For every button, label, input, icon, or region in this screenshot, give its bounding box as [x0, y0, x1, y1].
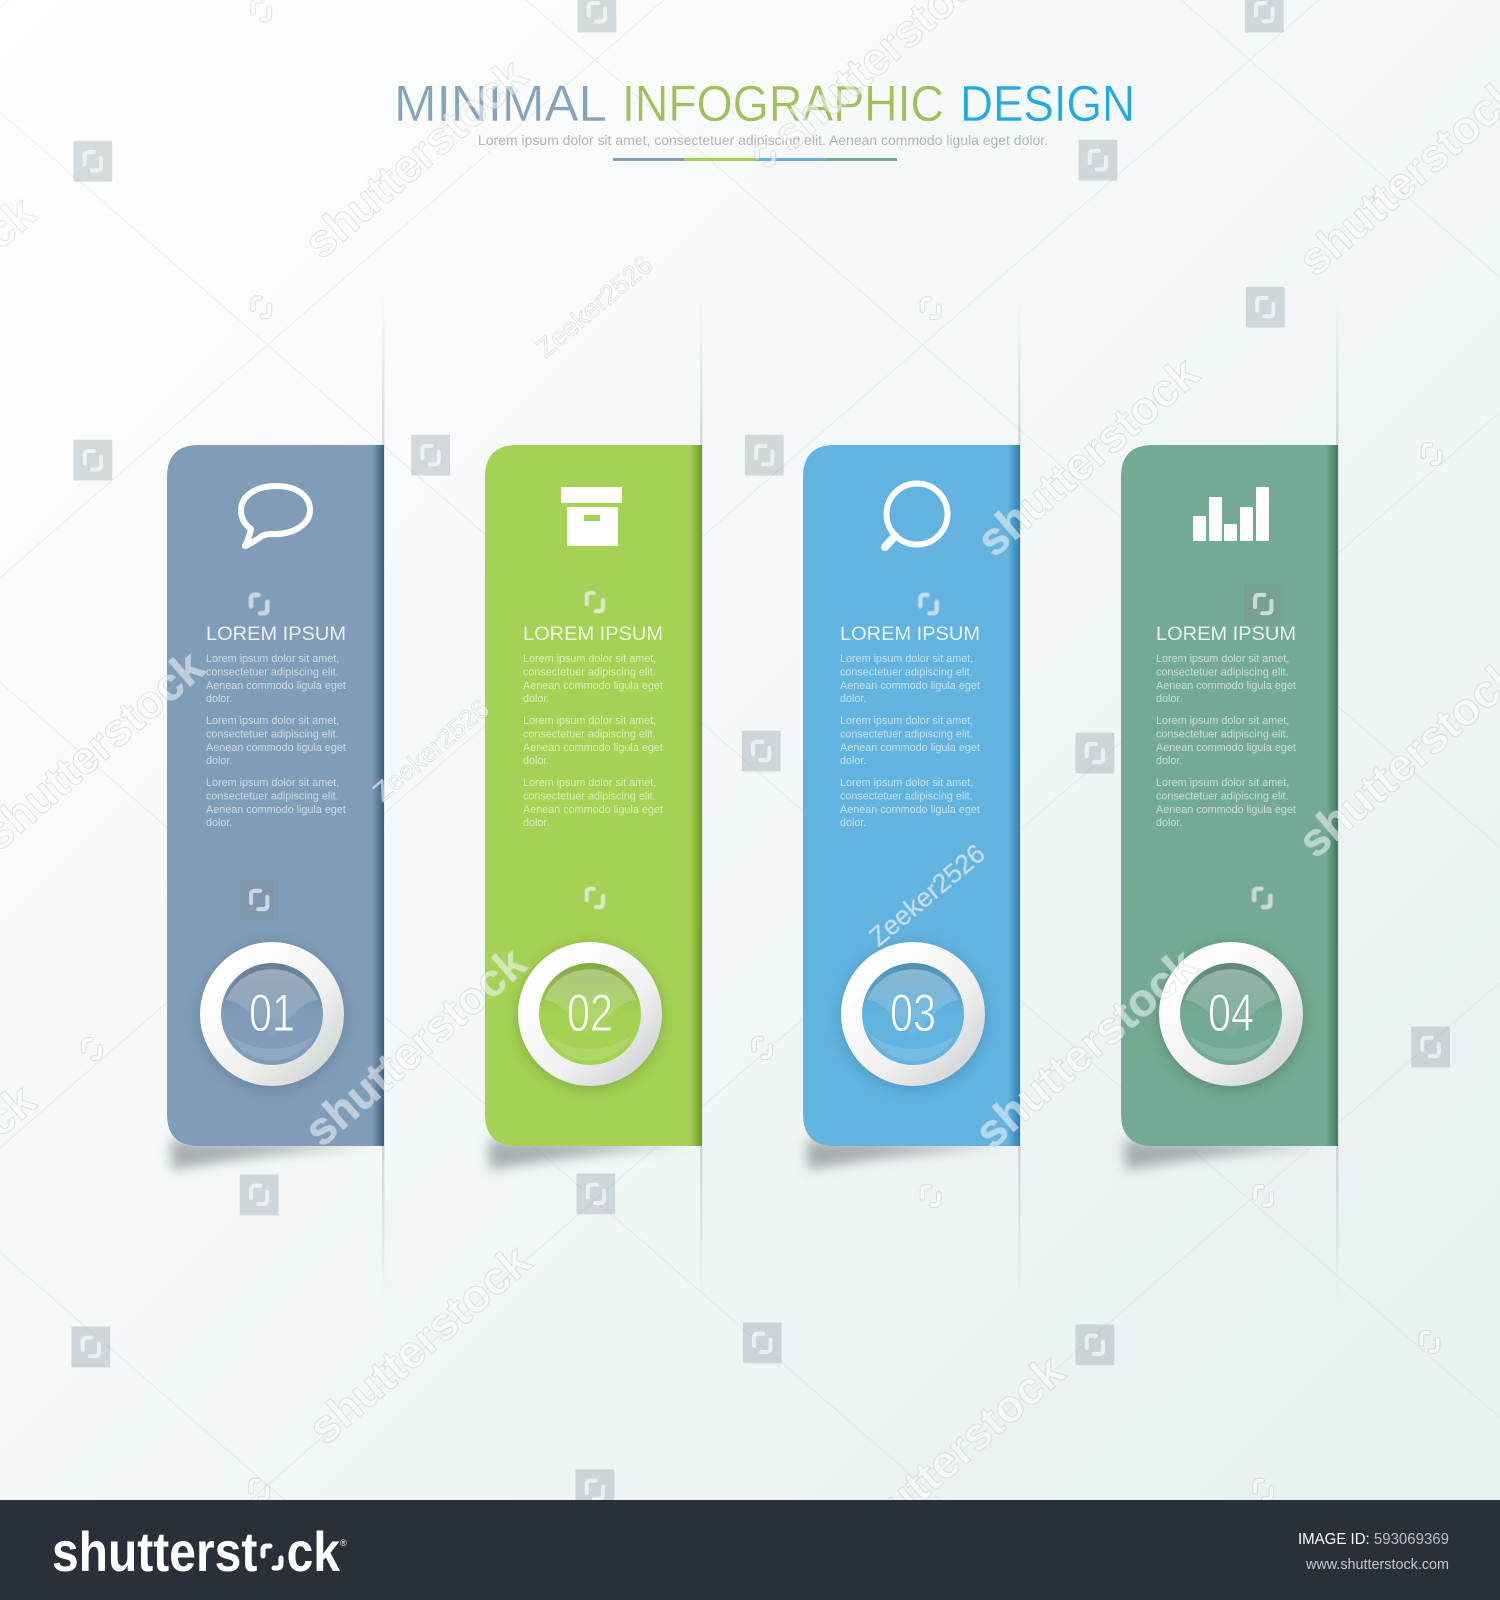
slit lines	[382, 295, 1338, 1305]
panel: card 02	[485, 445, 702, 1170]
watermark overlay: shutterstock	[966, 346, 1209, 566]
watermark overlay: Zeeker2526	[863, 838, 991, 952]
body text: Lorem ipsum dolor sit amet,	[523, 715, 656, 727]
icon: speech bubble	[241, 486, 310, 546]
body text: Lorem ipsum dolor sit amet,	[1156, 653, 1289, 665]
body text: dolor.	[523, 693, 549, 705]
card shadow	[806, 1140, 1006, 1170]
body text: Aenean commodo ligula eget	[840, 680, 980, 692]
watermark overlay: shutterstock	[298, 1234, 540, 1454]
body text: Aenean commodo ligula eget	[206, 804, 346, 816]
watermark overlay: shutterstock	[294, 48, 536, 268]
panel: card 03	[803, 445, 1020, 1170]
body text: dolor.	[523, 755, 549, 767]
card edge	[1326, 445, 1338, 1146]
body text: Lorem ipsum dolor sit amet,	[840, 715, 973, 727]
watermark overlay: Zeeker2526	[367, 693, 495, 807]
heading: LOREM IPSUM	[523, 623, 663, 645]
number badge: 01	[249, 984, 295, 1043]
body text: Lorem ipsum dolor sit amet,	[523, 653, 656, 665]
body text: dolor.	[1156, 693, 1182, 705]
heading: LOREM IPSUM	[206, 623, 346, 645]
body text: dolor.	[840, 755, 866, 767]
body text	[840, 653, 980, 829]
body text: dolor.	[1156, 755, 1182, 767]
card edge	[372, 445, 384, 1146]
body text: Lorem ipsum dolor sit amet,	[206, 777, 339, 789]
body text: Aenean commodo ligula eget	[206, 680, 346, 692]
body text: dolor.	[523, 817, 549, 829]
footer url: www.shutterstock.com	[1305, 1556, 1449, 1573]
panel: card 04	[1121, 445, 1338, 1170]
image id: IMAGE ID: 593069369	[1298, 1531, 1449, 1548]
watermark overlay: shutterstock	[832, 1344, 1074, 1564]
number badge	[839, 942, 987, 1091]
body text: dolor.	[206, 755, 232, 767]
body text: Lorem ipsum dolor sit amet,	[523, 777, 656, 789]
panel: card 01	[167, 445, 384, 1170]
number badge	[516, 942, 664, 1091]
card shadow	[170, 1140, 370, 1170]
footer bar	[0, 1500, 1500, 1600]
number badge	[1157, 942, 1305, 1091]
body text: consectetuer adipiscing elit.	[1156, 790, 1289, 802]
body text: Aenean commodo ligula eget	[206, 742, 346, 754]
body text: consectetuer adipiscing elit.	[523, 728, 656, 740]
card body	[167, 445, 384, 1146]
card body	[485, 445, 702, 1146]
body text: Lorem ipsum dolor sit amet,	[1156, 715, 1289, 727]
title: MINIMAL	[394, 75, 607, 132]
body text: consectetuer adipiscing elit.	[1156, 666, 1289, 678]
card shadow	[1124, 1140, 1324, 1170]
body text	[523, 653, 663, 829]
body text: Lorem ipsum dolor sit amet,	[206, 653, 339, 665]
logo bracket mark	[263, 1546, 281, 1568]
body text: Aenean commodo ligula eget	[1156, 804, 1296, 816]
body text: Aenean commodo ligula eget	[523, 742, 663, 754]
card shadow	[488, 1140, 688, 1170]
watermark overlay: Zeeker2526	[530, 249, 658, 363]
body text: consectetuer adipiscing elit.	[206, 790, 339, 802]
title	[394, 75, 1135, 132]
body text: Aenean commodo ligula eget	[840, 804, 980, 816]
watermark overlay: shutterstock	[964, 938, 1207, 1158]
body text: consectetuer adipiscing elit.	[523, 790, 656, 802]
card body	[803, 445, 1020, 1146]
number badge: 04	[1208, 984, 1254, 1043]
body text: consectetuer adipiscing elit.	[206, 666, 339, 678]
body text: Aenean commodo ligula eget	[1156, 680, 1296, 692]
body text: dolor.	[1156, 817, 1182, 829]
registered mark: ®	[340, 1538, 347, 1548]
body text: dolor.	[840, 817, 866, 829]
title underline	[613, 158, 897, 161]
icon: bar chart	[1193, 487, 1269, 541]
heading: LOREM IPSUM	[1156, 623, 1296, 645]
number badge: 02	[567, 984, 613, 1043]
footer logo: shutterstock	[52, 1520, 341, 1583]
body text: dolor.	[206, 817, 232, 829]
body text: Aenean commodo ligula eget	[523, 680, 663, 692]
body text: consectetuer adipiscing elit.	[206, 728, 339, 740]
body text: Aenean commodo ligula eget	[1156, 742, 1296, 754]
body text: consectetuer adipiscing elit.	[840, 790, 973, 802]
card edge	[1008, 445, 1020, 1146]
body text: Lorem ipsum dolor sit amet,	[840, 653, 973, 665]
body text: dolor.	[206, 693, 232, 705]
body text: Lorem ipsum dolor sit amet,	[840, 777, 973, 789]
number badge	[198, 942, 346, 1091]
body text	[1156, 653, 1296, 829]
body text: dolor.	[840, 693, 866, 705]
icon: archive box	[561, 487, 622, 546]
heading: LOREM IPSUM	[840, 623, 980, 645]
subtitle: Lorem ipsum dolor sit amet, consectetuer adipiscing elit. Aenean commodo ligula eget dolor.	[478, 132, 1048, 148]
icon: magnifier	[885, 484, 948, 547]
body text: consectetuer adipiscing elit.	[840, 666, 973, 678]
body text	[206, 653, 346, 829]
watermark overlay: shutterstock	[294, 936, 536, 1156]
card edge	[690, 445, 702, 1146]
body text: Aenean commodo ligula eget	[840, 742, 980, 754]
body text: consectetuer adipiscing elit.	[1156, 728, 1289, 740]
title: DESIGN	[960, 75, 1135, 132]
body text: consectetuer adipiscing elit.	[840, 728, 973, 740]
body text: consectetuer adipiscing elit.	[523, 666, 656, 678]
number badge: 03	[890, 984, 936, 1043]
body text: Lorem ipsum dolor sit amet,	[206, 715, 339, 727]
card body	[1121, 445, 1338, 1146]
title: INFOGRAPHIC	[622, 75, 944, 132]
body text: Aenean commodo ligula eget	[523, 804, 663, 816]
body text: Lorem ipsum dolor sit amet,	[1156, 777, 1289, 789]
